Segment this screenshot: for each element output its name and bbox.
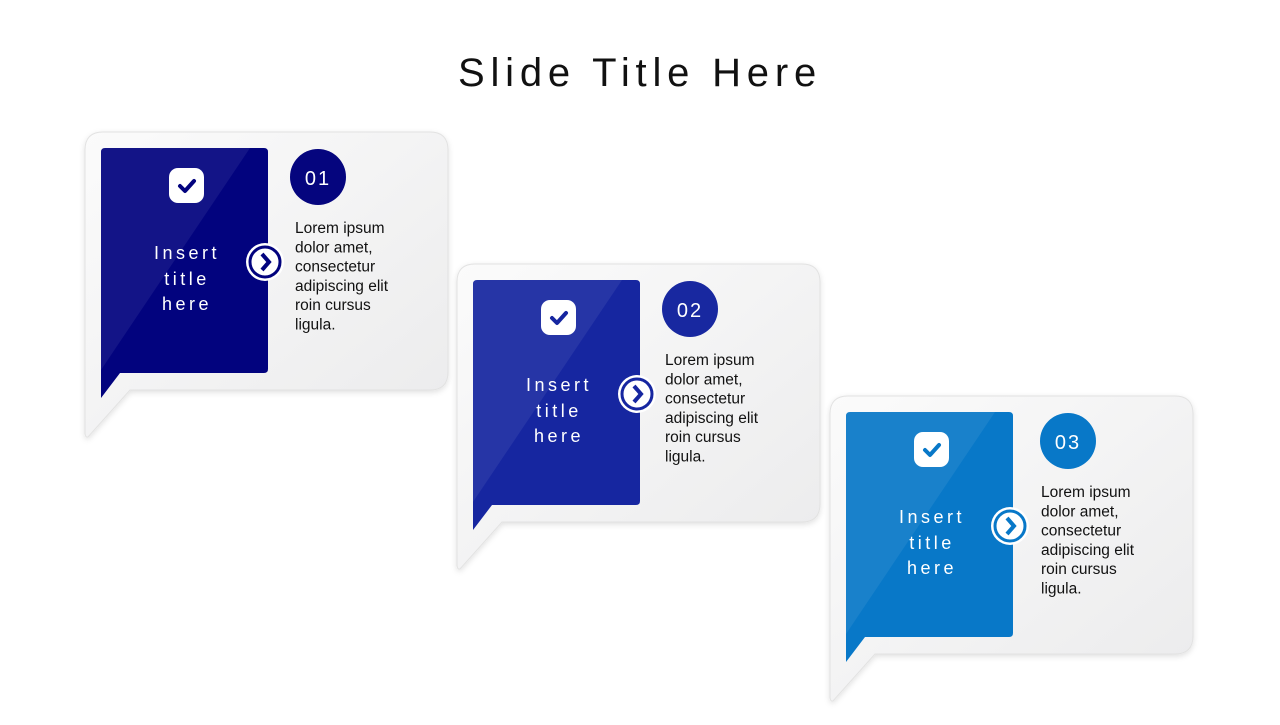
body text: adipiscing elit <box>1041 542 1135 559</box>
title box: title <box>536 401 582 421</box>
body text: consectetur <box>295 259 375 276</box>
title box: Insert <box>526 375 592 395</box>
body text: consectetur <box>1041 523 1121 540</box>
number badge: 03 <box>1055 432 1081 454</box>
icon: check <box>541 300 576 335</box>
title box: Insert <box>899 507 965 527</box>
body text: consectetur <box>665 391 745 408</box>
body text: ligula. <box>1041 580 1082 598</box>
number badge: 01 <box>305 168 331 190</box>
body text: Lorem ipsum <box>295 220 385 237</box>
arrow <box>246 243 284 281</box>
arrow <box>618 375 656 413</box>
number badge <box>662 281 718 337</box>
body text: adipiscing elit <box>295 278 389 295</box>
title box: title <box>164 269 210 289</box>
title box: Insert <box>154 243 220 263</box>
number badge <box>290 149 346 205</box>
body text: dolor amet, <box>295 239 373 256</box>
panel: step 01 <box>85 132 448 437</box>
body text: dolor amet, <box>665 371 743 388</box>
body text: ligula. <box>295 316 336 334</box>
title: Slide Title Here <box>458 51 822 95</box>
body text: roin cursus <box>1041 561 1117 578</box>
body text: roin cursus <box>665 429 741 446</box>
title box <box>101 148 268 398</box>
body text: ligula. <box>665 448 706 466</box>
title box: title <box>909 533 955 553</box>
number badge <box>1040 413 1096 469</box>
bubble background <box>85 132 448 437</box>
bubble background <box>457 264 820 569</box>
panel: step 03 <box>830 396 1193 701</box>
arrow <box>991 507 1029 545</box>
title box: here <box>907 558 957 578</box>
body text: roin cursus <box>295 297 371 314</box>
title box: here <box>534 426 584 446</box>
bubble background <box>830 396 1193 701</box>
title box <box>473 280 640 530</box>
body text: dolor amet, <box>1041 503 1119 520</box>
title box: here <box>162 294 212 314</box>
number badge: 02 <box>677 300 703 322</box>
body text: adipiscing elit <box>665 410 759 427</box>
title box <box>846 412 1013 662</box>
icon: check <box>169 168 204 203</box>
icon: check <box>914 432 949 467</box>
body text: Lorem ipsum <box>1041 484 1131 501</box>
panel: step 02 <box>457 264 820 569</box>
body text: Lorem ipsum <box>665 352 755 369</box>
